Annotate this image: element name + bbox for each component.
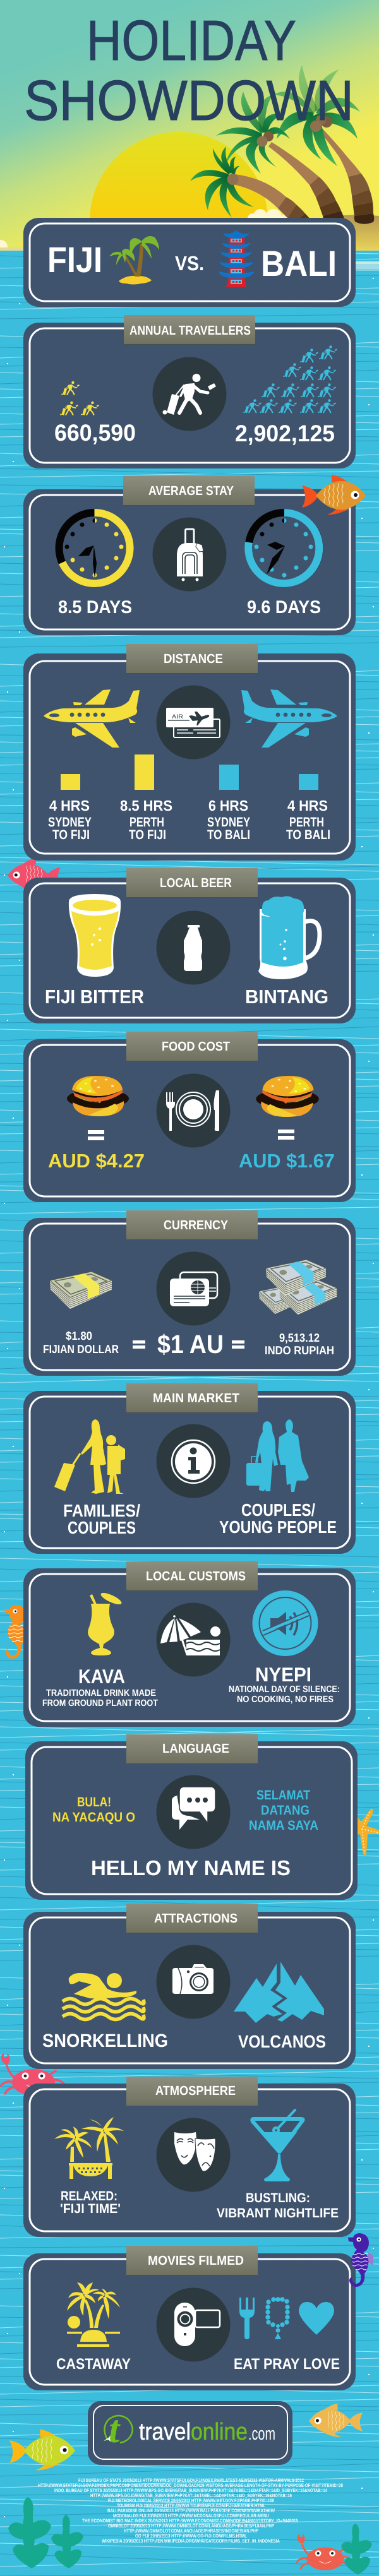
sources list <box>38 2478 344 2544</box>
heading label: MAIN MARKET <box>153 1391 239 1405</box>
icon: traveller in circle <box>153 357 226 431</box>
sydney to bali: 6 HRS <box>208 797 248 814</box>
icon: beer glass <box>69 894 121 977</box>
sun <box>90 132 268 310</box>
kava text <box>42 1665 158 1708</box>
sources list: FIJI METEOROLOGICAL SERVICE 20/05/2013 HTTP://WWW.MET.GOV.FJ/PAGE.PHP?ID=100 <box>108 2498 275 2503</box>
perth to fiji: PERTH <box>129 815 164 830</box>
yellow traveller pictogram <box>60 381 99 415</box>
sydney to bali <box>207 797 250 842</box>
fiji rate: $1.80 <box>66 1329 92 1342</box>
sources list: GO FIJI 20/05/2013 HTTP://WWW.GO-FIJI.COM/FILMS.HTML <box>135 2533 247 2539</box>
icon: information in circle <box>157 1424 230 1498</box>
fiji market: COUPLES <box>68 1518 136 1537</box>
icon: suitcase in circle <box>153 518 226 591</box>
bali market: YOUNG PEOPLE <box>219 1517 337 1537</box>
chart: fiji clock <box>59 513 130 583</box>
bali traveller count: 2,902,125 <box>235 420 335 446</box>
perth to bali: PERTH <box>289 815 324 830</box>
heading label <box>126 1904 258 1933</box>
icon: credit cards in circle <box>157 1251 230 1326</box>
icon: beer mug <box>258 896 320 979</box>
bar chart: flight hours <box>61 754 318 790</box>
perth to fiji: 8.5 HRS <box>120 797 172 814</box>
heading label <box>126 644 258 674</box>
heading label: MOVIES FILMED <box>148 2253 244 2268</box>
icon: fiji money stack <box>50 1272 112 1309</box>
icon: blue plane <box>241 689 337 748</box>
icon: prayer beads <box>265 2297 290 2339</box>
icon: fork <box>239 2298 255 2339</box>
fiji beer name: FIJI BITTER <box>45 986 144 1008</box>
fiji greeting: BULA! <box>77 1795 111 1810</box>
icon: speech bubbles in circle <box>157 1775 230 1849</box>
heading label <box>124 315 255 345</box>
fiji atmosphere text: 'FIJI TIME' <box>60 2202 121 2216</box>
bali atmosphere text <box>217 2191 339 2221</box>
icon: red fish behind panels <box>8 858 61 891</box>
logo mark: t <box>109 2408 121 2451</box>
sydney to fiji <box>48 797 92 842</box>
volcanos label: VOLCANOS <box>238 2032 326 2051</box>
logo mark <box>104 2408 133 2451</box>
equals sign left <box>88 1130 104 1140</box>
panel: currency <box>23 1210 356 1376</box>
icon: yellow plane <box>44 689 140 748</box>
icon: bali burger <box>256 1076 319 1117</box>
sources list: THE ECONOMIST BIG MAC INDEX 20/05/2013 HTTP://WWW.ECONOMIST.COM/NODE/9448015?STORY_ID=9448015 <box>82 2518 299 2524</box>
bali heading: BALI <box>261 244 337 284</box>
heading label <box>126 2246 258 2275</box>
clouds near horizon <box>0 209 290 254</box>
heading label: ATTRACTIONS <box>154 1911 238 1926</box>
heading label <box>126 1032 258 1061</box>
fiji greeting <box>52 1795 135 1825</box>
bali atmosphere text: BUSTLING: <box>246 2191 310 2205</box>
icon: coral crab <box>297 2534 352 2570</box>
panel: language <box>25 1734 358 1900</box>
sydney to fiji: TO FIJI <box>52 828 90 842</box>
icon: seaweed left large <box>8 2497 51 2568</box>
fiji atmosphere text <box>60 2189 121 2216</box>
fiji rate <box>43 1329 119 1356</box>
panel: fiji vs bali <box>23 218 356 307</box>
heading label: LOCAL CUSTOMS <box>146 1569 246 1583</box>
icon: palms and hammock <box>54 2117 124 2179</box>
icon: theatre masks in circle <box>157 2118 230 2192</box>
equals sign right <box>278 1130 294 1140</box>
nyepi text: NATIONAL DAY OF SILENCE: <box>229 1685 340 1695</box>
sydney to fiji: 4 HRS <box>49 797 90 814</box>
icon: beach umbrella in circle <box>157 1602 230 1677</box>
palm tree front <box>190 146 312 221</box>
perth to fiji <box>120 797 172 842</box>
heading label <box>123 476 255 506</box>
sources list: FIJI BUREAU OF STATS 20/05/2013 HTTP://WWW.STATSFIJI.GOV.FJ/INDEX.PHP/LATEST-NEWS/232-VISITOR-ARRIVALS-2012 <box>78 2478 304 2483</box>
icon: boarding pass in circle <box>157 686 230 759</box>
vs label: VS. <box>175 252 204 275</box>
eat pray love label: EAT PRAY LOVE <box>234 2356 340 2373</box>
heading label: FOOD COST <box>162 1039 230 1054</box>
icon: plate and cutlery in circle <box>157 1073 230 1148</box>
heading label <box>126 868 258 898</box>
icon: pink crab <box>1 2053 65 2096</box>
palm tree middle <box>216 92 345 221</box>
panel: local beer <box>23 868 356 1023</box>
icon: yellow fish <box>309 2404 363 2437</box>
heading label <box>126 2077 258 2106</box>
icon: heart <box>299 2302 334 2335</box>
nyepi text: NO COOKING, NO FIRES <box>237 1695 334 1705</box>
logo wordmark: .com <box>248 2424 275 2443</box>
sydney to bali: SYDNEY <box>207 815 250 830</box>
heading label: ANNUAL TRAVELLERS <box>129 323 251 338</box>
icon: martini glass <box>252 2110 303 2181</box>
blue traveller pictogram <box>243 345 337 413</box>
icon: fiji burger <box>67 1076 129 1116</box>
panel: annual travellers <box>23 315 356 468</box>
perth to bali <box>286 797 330 842</box>
bali greeting: NAMA SAYA <box>249 1818 318 1833</box>
bali stay label: 9.6 DAYS <box>247 597 321 617</box>
icon: seaweed right <box>341 2524 372 2575</box>
icon: palm island <box>109 236 159 284</box>
nyepi text <box>229 1663 340 1705</box>
icon: swimmer <box>63 1973 144 2019</box>
fiji burger price: AUD $4.27 <box>48 1150 145 1172</box>
panel: distance <box>23 644 356 861</box>
bali burger price: AUD $1.67 <box>239 1150 335 1172</box>
panel: atmosphere <box>23 2077 356 2237</box>
icon: orange seahorse <box>4 1605 25 1659</box>
heading label <box>126 1383 258 1413</box>
bali market <box>219 1500 337 1537</box>
kava text: KAVA <box>78 1665 125 1688</box>
english translation: HELLO MY NAME IS <box>91 1857 291 1880</box>
fiji stay label: 8.5 DAYS <box>58 597 132 617</box>
icon: couple silhouette <box>246 1419 309 1492</box>
panel: main market <box>23 1383 356 1554</box>
sydney to bali: TO BALI <box>207 828 250 842</box>
icon: volcano <box>234 1962 324 2023</box>
palm tree back <box>273 65 374 224</box>
icon: family silhouette <box>54 1419 125 1494</box>
heading label <box>126 1561 258 1591</box>
sand island on the right <box>310 215 379 273</box>
perth to bali: 4 HRS <box>287 797 328 814</box>
panel: food cost <box>23 1032 356 1202</box>
heading label: LANGUAGE <box>162 1741 229 1756</box>
logo wordmark <box>139 2419 275 2445</box>
fiji market <box>63 1501 140 1537</box>
icon: bali money stacks <box>259 1260 337 1315</box>
panel: movies filmed <box>23 2246 356 2390</box>
sources list: BALI PARADISE ONLINE 20/05/2013 HTTP://WWW.BALI-PARADISE.COM/NEWS/WEATHER/ <box>107 2508 275 2513</box>
icon: boarding pass in circle: AIR <box>172 713 183 720</box>
icon: palms at sunset <box>67 2282 120 2347</box>
icon: green fish <box>9 2430 75 2471</box>
icon: silence speaker <box>255 1594 315 1653</box>
castaway label: CASTAWAY <box>56 2356 131 2373</box>
fiji greeting: NA YACAQU O <box>52 1810 135 1825</box>
icon: seaweed left small <box>51 2515 83 2568</box>
heading label: DISTANCE <box>164 652 223 666</box>
heading label: AVERAGE STAY <box>148 484 234 498</box>
sources list: WIKIPEDIA 20/05/2013 HTTP://EN.WIKIPEDIA.ORG/WIKI/CATEGORY:FILMS_SET_IN_INDONESIA <box>102 2538 280 2544</box>
logo wordmark: travel <box>139 2419 191 2445</box>
nyepi text: NYEPI <box>255 1663 311 1686</box>
icon: pagoda <box>219 230 255 287</box>
bali greeting <box>249 1788 318 1833</box>
title <box>24 9 354 133</box>
icon: bottle in circle <box>157 910 230 985</box>
fiji heading: FIJI <box>47 240 102 280</box>
panel: attractions <box>23 1904 356 2069</box>
icon: video camera in circle <box>157 2288 230 2361</box>
bali market: COUPLES/ <box>241 1500 315 1520</box>
logo wordmark: online <box>191 2419 248 2445</box>
icon: purple seahorse <box>348 2233 373 2287</box>
sources list: TOURISM FIJI 20/05/2013 HTTP://WWW.TOURISMFIJI.COM/FIJI-WEATHER.HTML <box>117 2503 265 2508</box>
logo panel: travelonline <box>88 2401 292 2465</box>
fiji rate: FIJIAN DOLLAR <box>43 1342 119 1356</box>
heading label: LOCAL BEER <box>160 876 232 890</box>
fiji market: FAMILIES/ <box>63 1501 140 1520</box>
heading label: CURRENCY <box>164 1218 228 1232</box>
perth to bali: TO BALI <box>286 828 330 842</box>
panel: average stay <box>23 476 356 635</box>
chart: bali clock <box>248 513 320 583</box>
sources list: MCDONALDS FIJI 20/05/2013 HTTP://WWW.MCDONALDSFIJI.COM/REGULAR-MENU <box>113 2513 269 2519</box>
heading label: ATMOSPHERE <box>155 2084 236 2098</box>
fiji traveller count: 660,590 <box>54 420 136 446</box>
bali rate <box>265 1331 334 1357</box>
icon: cocktail <box>88 1590 123 1655</box>
bali atmosphere text: VIBRANT NIGHTLIFE <box>217 2206 339 2221</box>
perth to fiji: TO FIJI <box>129 828 166 842</box>
heading label <box>126 1210 258 1240</box>
sources list: OMNIGLOT 20/05/2013 HTTP://WWW.OMNIGLOT.COM/LANGUAGE/PHRASES/FIJIAN.PHP <box>108 2523 274 2529</box>
title: HOLIDAY <box>87 9 296 73</box>
kava text: FROM GROUND PLANT ROOT <box>42 1698 158 1708</box>
panel: local customs <box>23 1561 356 1727</box>
bali greeting: SELAMAT <box>256 1788 310 1803</box>
fiji atmosphere text: RELAXED: <box>61 2189 117 2203</box>
heading label <box>126 1734 258 1764</box>
sky background with sunset gradient <box>0 0 379 253</box>
one australian dollar equation: $1 AU <box>157 1330 224 1359</box>
bali greeting: DATANG <box>261 1803 310 1818</box>
snorkelling label: SNORKELLING <box>42 2030 168 2051</box>
sources list: HTTP://WWW.OMNIGLOT.COM/LANGUAGE/PHRASES/INDONESIAN.PHP <box>124 2528 258 2534</box>
title: SHOWDOWN <box>24 69 354 133</box>
one australian dollar equation <box>133 1330 244 1359</box>
bali rate: 9,513.12 <box>279 1331 320 1344</box>
icon: camera in circle <box>157 1945 230 2019</box>
bali rate: INDO RUPIAH <box>265 1344 334 1357</box>
icon: starfish <box>335 1809 379 1855</box>
sydney to fiji: SYDNEY <box>48 815 92 830</box>
kava text: TRADITIONAL DRINK MADE <box>46 1688 156 1698</box>
bali beer name: BINTANG <box>245 986 328 1008</box>
icon: orange fish <box>302 475 366 515</box>
sources list: HTTP://WWW.BPS.GO.ID/ENG/TAB_SUB/VIEW.PHP?KAT=2&TABEL=1&DAFTAR=1&ID_SUBYEK=16&NOTAB=16 <box>90 2493 292 2498</box>
